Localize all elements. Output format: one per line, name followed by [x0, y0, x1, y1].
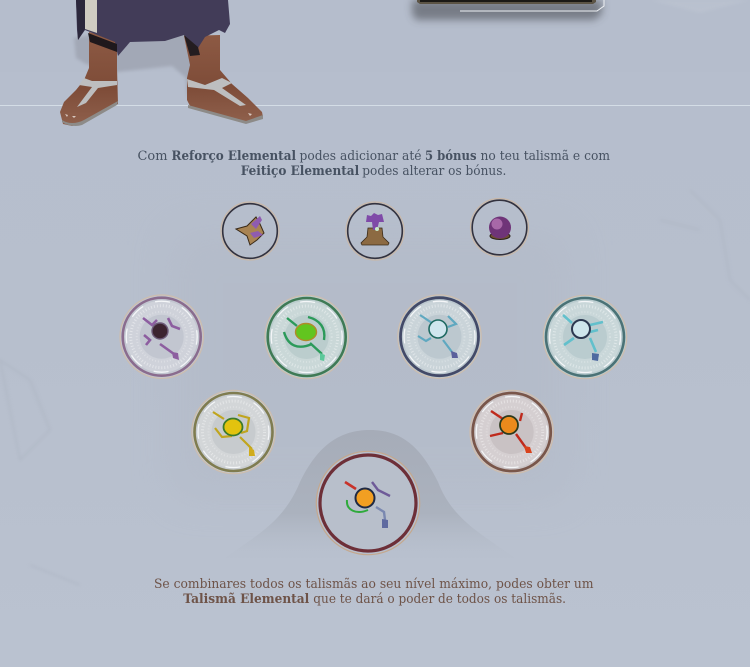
- intro text: Com: [138, 148, 168, 163]
- talisman: yellow: [192, 390, 275, 474]
- divider line: [0, 105, 750, 106]
- talisman: elemental: [316, 451, 420, 555]
- icon: orb item: [470, 198, 528, 256]
- talisman: red: [470, 390, 553, 474]
- intro text: Feitiço Elemental: [241, 163, 359, 178]
- character figure: feet and robe: [60, 0, 263, 126]
- intro text: no teu talismã e com: [480, 148, 610, 163]
- intro text: 5 bónus: [425, 148, 476, 163]
- talisman: purple: [120, 295, 203, 378]
- intro text: Reforço Elemental: [172, 148, 296, 163]
- top panel remnant: [412, 0, 604, 20]
- icon: Reforço Elemental item: [221, 202, 279, 260]
- right leg and foot: [184, 35, 263, 124]
- left leg and foot: [60, 32, 118, 126]
- intro text: podes adicionar até: [300, 148, 422, 163]
- icon: Feitiço Elemental item: [346, 202, 404, 260]
- closing text: [154, 576, 594, 606]
- talisman: teal: [543, 295, 627, 379]
- closing text: Se combinares todos os talismãs ao seu nível máximo, podes obter um: [154, 576, 594, 591]
- closing text: que te dará o poder de todos os talismãs.: [313, 591, 566, 606]
- hill behind elemental talisman: [225, 430, 515, 558]
- intro text: podes alterar os bónus.: [362, 163, 506, 178]
- intro text: [138, 148, 610, 178]
- talisman: blue: [398, 295, 481, 378]
- closing text: Talismã Elemental: [183, 591, 309, 606]
- robe: [76, 0, 230, 56]
- talisman: green: [265, 295, 348, 379]
